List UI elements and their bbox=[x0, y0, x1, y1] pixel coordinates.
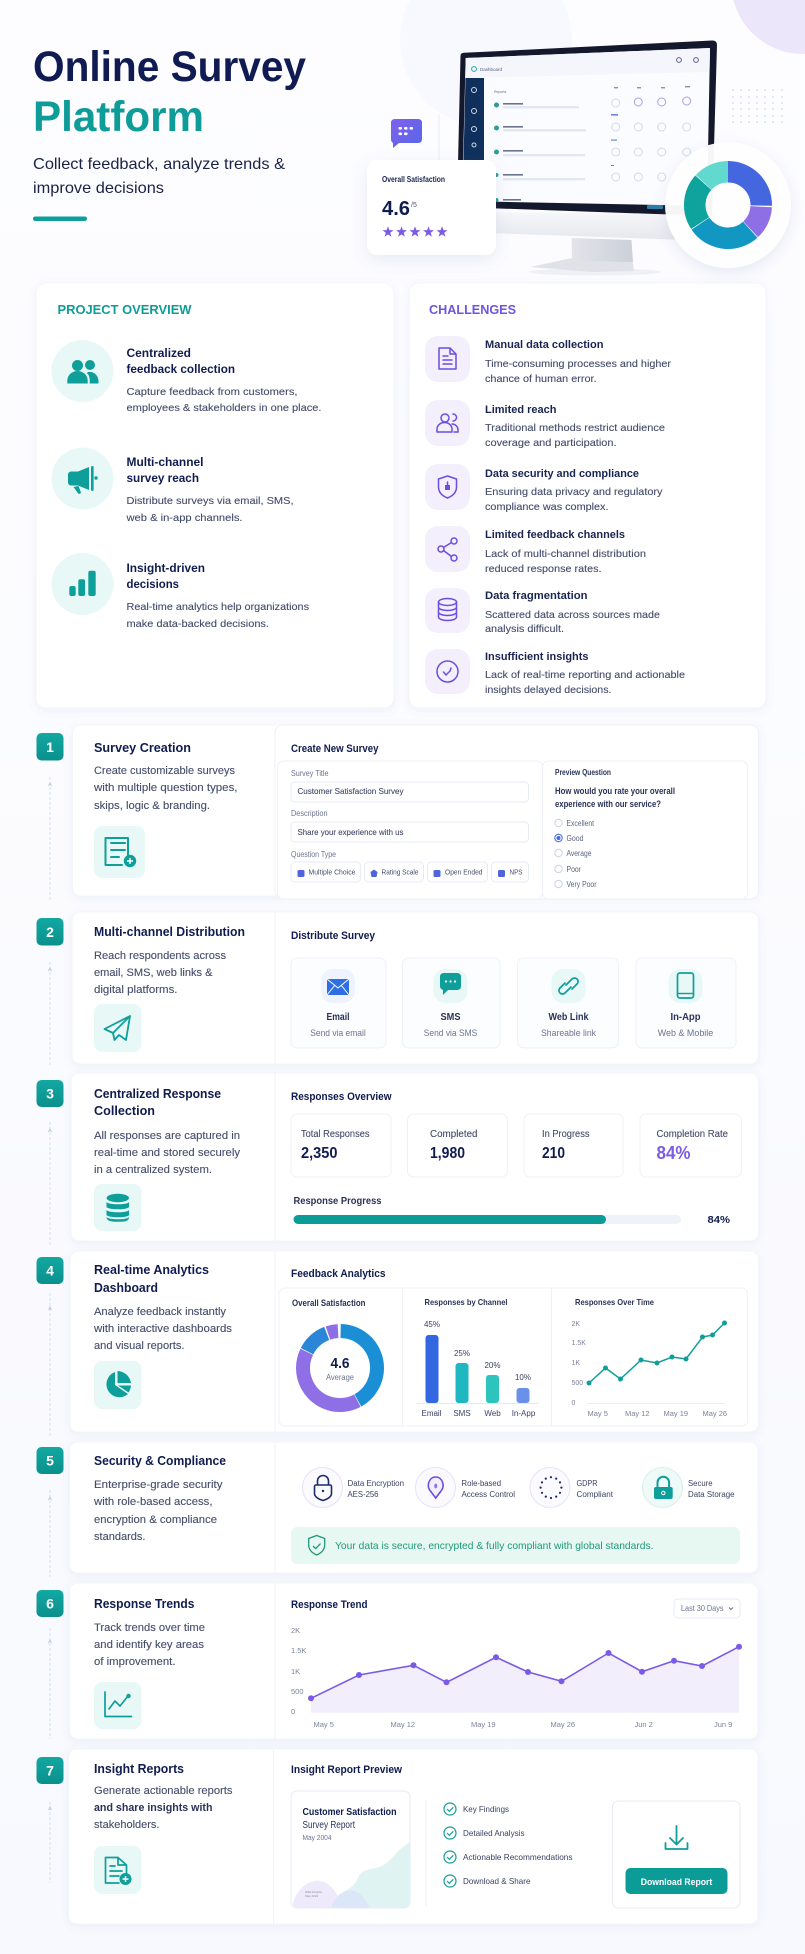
survey form: Multiple Choice bbox=[308, 868, 356, 876]
step title and description: Response Trends bbox=[94, 1596, 194, 1611]
report cover preview: Survey Report bbox=[302, 1820, 355, 1831]
checklist bbox=[444, 1803, 572, 1887]
item: multi-channel survey reach: Multi-channel bbox=[126, 455, 204, 469]
item: centralized feedback collection: employees & stakeholders in one place. bbox=[126, 402, 322, 414]
challenge: insufficient insights bbox=[425, 649, 685, 696]
badge 2: 2 bbox=[46, 924, 54, 940]
item: multi-channel survey reach: web & in-app channels. bbox=[125, 512, 242, 524]
survey form: Question Type bbox=[291, 850, 336, 859]
chart: response trend line: May 12 bbox=[390, 1720, 415, 1729]
chart: responses by channel: SMS bbox=[453, 1409, 471, 1418]
preview question: How would you rate your overall bbox=[555, 786, 675, 796]
survey form: Rating Scale bbox=[382, 868, 418, 876]
channel: email: Send via email bbox=[310, 1028, 366, 1038]
step title and description: Multi-channel Distribution bbox=[94, 924, 245, 939]
badge 3 bbox=[36, 1080, 64, 1107]
donut chart: header bbox=[665, 142, 791, 268]
chart: responses over time: May 26 bbox=[702, 1409, 727, 1418]
chart: responses by channel: 25% bbox=[454, 1349, 470, 1358]
challenge: limited reach: Traditional methods restrict audience bbox=[485, 422, 665, 434]
chart: responses over time: 1K bbox=[572, 1360, 580, 1367]
subtitle bbox=[33, 156, 285, 197]
report cover preview: May 2024 bbox=[305, 1894, 319, 1898]
badge 2 bbox=[36, 918, 64, 946]
feature: gdpr compliant bbox=[530, 1468, 614, 1508]
step title and description: of improvement. bbox=[94, 1656, 176, 1668]
preview question: Poor bbox=[566, 865, 581, 874]
chart: response trend line: May 5 bbox=[314, 1720, 334, 1729]
survey form: Share your experience with us bbox=[298, 827, 404, 837]
card: overall satisfaction: /5 bbox=[411, 202, 417, 209]
step title and description: Track trends over time bbox=[94, 1622, 205, 1634]
chart: responses by channel: In-App bbox=[512, 1409, 536, 1418]
step title and description: Enterprise-grade security bbox=[94, 1479, 223, 1491]
channel: sms: SMS bbox=[440, 1012, 461, 1023]
feature: gdpr compliant: Compliant bbox=[576, 1490, 614, 1499]
badge 7: 7 bbox=[46, 1762, 54, 1778]
step title and description: Collection bbox=[94, 1103, 155, 1118]
challenge: limited reach bbox=[425, 400, 665, 449]
panel: project overview bbox=[36, 283, 394, 708]
chart: responses over time: May 19 bbox=[664, 1409, 688, 1418]
item: multi-channel survey reach bbox=[52, 448, 294, 524]
chart: responses over time: 1.5K bbox=[572, 1340, 586, 1347]
chart: overall satisfaction donut bbox=[290, 1298, 390, 1418]
feature: secure data storage bbox=[642, 1468, 735, 1508]
card: overall satisfaction: Overall Satisfaction bbox=[382, 174, 445, 184]
title: Platform bbox=[33, 93, 204, 141]
card: overall satisfaction bbox=[367, 160, 496, 255]
chart: responses by channel: 45% bbox=[424, 1320, 440, 1329]
subtitle: improve decisions bbox=[33, 180, 164, 197]
challenge: limited feedback channels: reduced response rates. bbox=[485, 563, 602, 575]
item: multi-channel survey reach: survey reach bbox=[126, 471, 199, 485]
step 4: real-time analytics dashboard bbox=[36, 1251, 758, 1437]
step 3: centralized response collection bbox=[36, 1073, 758, 1245]
chart: responses by channel: Email bbox=[421, 1409, 442, 1418]
accent bar bbox=[33, 216, 87, 221]
icon: report with plus bbox=[94, 1846, 142, 1894]
step title and description: skips, logic & branding. bbox=[94, 800, 210, 812]
survey form: Customer Satisfaction Survey bbox=[298, 786, 404, 796]
feature: data encryption: Data Encryption bbox=[348, 1479, 404, 1488]
step title and description: Survey Creation bbox=[94, 740, 191, 755]
badge 7 bbox=[36, 1757, 64, 1784]
chart: responses by channel bbox=[417, 1297, 538, 1418]
preview question: Good bbox=[566, 834, 584, 843]
challenge: insufficient insights: Insufficient insights bbox=[485, 651, 588, 663]
badge 3: 3 bbox=[46, 1086, 54, 1102]
item: multi-channel survey reach: Distribute surveys via email, SMS, bbox=[126, 495, 294, 507]
heading: insight report preview: Insight Report Preview bbox=[291, 1764, 402, 1776]
challenge: manual data collection: Time-consuming processes and higher bbox=[485, 358, 672, 370]
channel: web link bbox=[518, 958, 618, 1048]
step title and description: with interactive dashboards bbox=[93, 1323, 233, 1335]
step title and description: All responses are captured in bbox=[94, 1130, 240, 1142]
channel: email bbox=[291, 958, 386, 1048]
item: centralized feedback collection: Centralized bbox=[126, 346, 191, 360]
survey form: Survey Title bbox=[291, 769, 329, 778]
checklist: Actionable Recommendations bbox=[463, 1852, 572, 1862]
chart: response trend line: 1K bbox=[291, 1667, 300, 1676]
chart: responses over time: May 12 bbox=[625, 1409, 650, 1418]
step title and description bbox=[94, 1086, 241, 1176]
heading: challenges: CHALLENGES bbox=[429, 302, 516, 317]
channel: web link: Shareable link bbox=[541, 1028, 596, 1038]
checklist: Detailed Analysis bbox=[463, 1828, 524, 1838]
chart: responses by channel: Responses by Channel bbox=[424, 1297, 508, 1307]
step title and description: and share insights with bbox=[94, 1802, 213, 1814]
step title and description: in a centralized system. bbox=[94, 1164, 212, 1176]
download box bbox=[612, 1801, 740, 1908]
card: overall satisfaction: 4.6 bbox=[382, 198, 410, 220]
step title and description bbox=[94, 1761, 233, 1831]
icon: survey form with plus bbox=[94, 826, 145, 878]
step title and description: Security & Compliance bbox=[94, 1453, 226, 1468]
item: centralized feedback collection bbox=[52, 340, 322, 414]
step title and description: Dashboard bbox=[94, 1280, 158, 1295]
chart: response trend line: May 26 bbox=[550, 1720, 575, 1729]
badge 4: 4 bbox=[46, 1262, 54, 1278]
step title and description: and identify key areas bbox=[94, 1639, 205, 1651]
badge 6: 6 bbox=[46, 1596, 54, 1612]
title bbox=[33, 43, 306, 141]
badge 1: 1 bbox=[46, 739, 54, 755]
chat bubble icon bbox=[391, 119, 422, 148]
survey form bbox=[278, 761, 542, 899]
floating divider line bbox=[438, 115, 440, 161]
monitor illustration: Reports bbox=[494, 90, 507, 94]
step title and description: Real-time Analytics bbox=[94, 1262, 209, 1277]
challenge: data security and compliance bbox=[425, 464, 663, 513]
challenge: limited feedback channels bbox=[425, 526, 646, 575]
step title and description bbox=[94, 1596, 205, 1668]
step 2: multi-channel distribution bbox=[36, 912, 758, 1067]
chart: response trend line: Jun 2 bbox=[634, 1720, 653, 1729]
heading: feedback analytics: Feedback Analytics bbox=[291, 1268, 386, 1280]
feature: data encryption bbox=[302, 1468, 404, 1508]
stat: completion rate: Completion Rate bbox=[656, 1129, 728, 1140]
challenge: limited reach: Limited reach bbox=[485, 404, 557, 416]
step title and description: encryption & compliance bbox=[94, 1514, 217, 1526]
step title and description: Centralized Response bbox=[94, 1086, 221, 1101]
chart: response trend line: 0 bbox=[291, 1707, 295, 1716]
item: insight-driven decisions: make data-backed decisions. bbox=[126, 618, 269, 630]
chart: responses by channel: Web bbox=[484, 1409, 501, 1418]
dropdown: last 30 days bbox=[674, 1599, 740, 1618]
chart: response trend line: 2K bbox=[291, 1626, 300, 1635]
panel: challenges bbox=[409, 283, 766, 708]
step title and description: real-time and stored securely bbox=[94, 1147, 241, 1159]
stat: in progress bbox=[524, 1114, 623, 1177]
chart: responses over time: 500 bbox=[572, 1380, 583, 1387]
dot grid bbox=[732, 89, 783, 123]
challenge: data fragmentation: analysis difficult. bbox=[485, 623, 564, 635]
chart: responses over time: 0 bbox=[572, 1400, 576, 1407]
stat: completed: 1,980 bbox=[430, 1145, 465, 1162]
stat: completion rate: 84% bbox=[656, 1143, 690, 1163]
item: insight-driven decisions bbox=[52, 553, 309, 630]
channel: web link: Web Link bbox=[548, 1012, 589, 1023]
step title and description: Create customizable surveys bbox=[94, 765, 235, 777]
feature: role-based access control: Role-based bbox=[462, 1479, 501, 1488]
item: centralized feedback collection: Capture feedback from customers, bbox=[126, 386, 298, 398]
progress bar: Response Progress bbox=[294, 1196, 382, 1207]
heading: project overview: PROJECT OVERVIEW bbox=[58, 302, 192, 317]
channel: in-app: In-App bbox=[670, 1012, 700, 1023]
title: Online Survey bbox=[33, 43, 306, 91]
challenge: manual data collection: chance of human error. bbox=[485, 373, 596, 385]
icon: paper plane bbox=[94, 1004, 142, 1052]
report cover preview bbox=[291, 1791, 410, 1908]
stat: total responses: 2,350 bbox=[301, 1145, 338, 1162]
channel: sms bbox=[402, 958, 500, 1048]
preview question: Preview Question bbox=[555, 768, 611, 777]
step 5: security and compliance bbox=[36, 1442, 758, 1577]
feature: role-based access control bbox=[416, 1468, 515, 1508]
channel: email: Email bbox=[326, 1012, 350, 1023]
button: download report: Download Report bbox=[641, 1877, 713, 1888]
step title and description bbox=[93, 1453, 226, 1543]
progress bar: 84% bbox=[708, 1214, 731, 1226]
step title and description bbox=[93, 740, 238, 812]
feature: data encryption: AES-256 bbox=[348, 1490, 379, 1499]
feature: role-based access control: Access Control bbox=[462, 1490, 515, 1499]
channel: in-app bbox=[636, 958, 736, 1048]
step title and description bbox=[94, 924, 245, 996]
challenge: limited feedback channels: Lack of multi-channel distribution bbox=[485, 548, 646, 560]
subtitle: Collect feedback, analyze trends & bbox=[33, 156, 285, 173]
icon: trend chart bbox=[94, 1682, 142, 1729]
challenge: data security and compliance: Ensuring data privacy and regulatory bbox=[485, 486, 663, 498]
stat: completed bbox=[408, 1114, 508, 1177]
challenge: insufficient insights: insights delayed decisions. bbox=[485, 684, 612, 696]
chart: response trend line: 500 bbox=[291, 1687, 304, 1696]
step title and description: standards. bbox=[94, 1531, 146, 1543]
step title and description: with role-based access, bbox=[93, 1496, 212, 1508]
step title and description: Analyze feedback instantly bbox=[94, 1306, 227, 1318]
chart: overall satisfaction donut: Overall Satisfaction bbox=[292, 1298, 366, 1308]
step title and description bbox=[93, 1262, 233, 1352]
item: insight-driven decisions: Insight-driven bbox=[126, 561, 205, 575]
feature: secure data storage: Data Storage bbox=[688, 1490, 735, 1499]
badge 6 bbox=[36, 1590, 64, 1617]
report cover preview: Customer Satisfaction bbox=[302, 1807, 396, 1818]
stat: completed: Completed bbox=[430, 1129, 478, 1140]
icon: pie chart bbox=[94, 1361, 142, 1409]
chart: response trend line: 1.5K bbox=[291, 1646, 306, 1655]
stat: total responses bbox=[291, 1114, 391, 1177]
survey form: Description bbox=[291, 809, 328, 818]
feature: gdpr compliant: GDPR bbox=[576, 1479, 598, 1488]
heading: distribute survey: Distribute Survey bbox=[291, 930, 376, 942]
channel: in-app: Web & Mobile bbox=[658, 1028, 713, 1038]
challenge: limited reach: coverage and participation. bbox=[485, 437, 616, 449]
report cover preview: May 2004 bbox=[302, 1833, 332, 1842]
chart: overall satisfaction donut: Average bbox=[326, 1373, 355, 1382]
channel: sms: Send via SMS bbox=[424, 1028, 477, 1038]
preview question: experience with our service? bbox=[555, 799, 661, 809]
step title and description: with multiple question types, bbox=[93, 782, 238, 794]
challenge: data fragmentation: Scattered data across sources made bbox=[485, 609, 660, 621]
step title and description: email, SMS, web links & bbox=[94, 967, 213, 979]
stat: in progress: In Progress bbox=[542, 1129, 590, 1140]
heading: response trend: Response Trend bbox=[291, 1599, 368, 1611]
checklist: Key Findings bbox=[463, 1804, 509, 1814]
chart: response trend line bbox=[291, 1626, 742, 1729]
step title and description: Generate actionable reports bbox=[94, 1785, 233, 1797]
challenge: manual data collection bbox=[425, 336, 672, 385]
step title and description: Reach respondents across bbox=[94, 950, 226, 962]
challenge: insufficient insights: Lack of real-time reporting and actionable bbox=[485, 669, 685, 681]
stat: completion rate bbox=[640, 1114, 742, 1177]
chart: responses by channel: 10% bbox=[515, 1373, 531, 1382]
feature: secure data storage: Secure bbox=[688, 1479, 713, 1488]
challenge: data security and compliance: compliance was complex. bbox=[485, 501, 608, 513]
challenge: manual data collection: Manual data collection bbox=[485, 339, 604, 351]
heading: create new survey: Create New Survey bbox=[291, 743, 379, 755]
survey form: NPS bbox=[510, 868, 522, 876]
preview question: Average bbox=[566, 849, 592, 858]
badge 1 bbox=[36, 733, 64, 760]
step 1: survey creation bbox=[36, 725, 758, 902]
challenge: data security and compliance: Data security and compliance bbox=[485, 468, 639, 480]
preview question bbox=[542, 761, 748, 899]
monitor illustration bbox=[457, 40, 717, 276]
badge 4 bbox=[36, 1257, 64, 1284]
monitor illustration: Dashboard bbox=[480, 67, 503, 72]
stat: total responses: Total Responses bbox=[301, 1129, 370, 1140]
challenge: data fragmentation bbox=[425, 588, 660, 635]
step 6: response trends bbox=[36, 1583, 758, 1739]
stat: in progress: 210 bbox=[542, 1145, 565, 1162]
item: insight-driven decisions: Real-time analytics help organizations bbox=[126, 601, 309, 613]
report cover preview: Wild Insights bbox=[305, 1890, 323, 1894]
chart: responses over time: Responses Over Time bbox=[575, 1297, 654, 1307]
chart: responses over time: 2K bbox=[572, 1321, 580, 1328]
step 7: insight reports bbox=[36, 1749, 758, 1924]
challenge: limited feedback channels: Limited feedback channels bbox=[485, 529, 625, 541]
security callout banner bbox=[291, 1527, 740, 1564]
preview question: Excellent bbox=[566, 819, 595, 828]
chart: overall satisfaction donut: 4.6 bbox=[330, 1355, 350, 1372]
progress bar bbox=[294, 1196, 731, 1226]
security callout banner: Your data is secure, encrypted & fully compliant with global standards. bbox=[335, 1540, 654, 1552]
item: centralized feedback collection: feedback collection bbox=[126, 362, 235, 376]
step title and description: digital platforms. bbox=[94, 984, 178, 996]
step title and description: Insight Reports bbox=[94, 1761, 184, 1776]
preview question: Very Poor bbox=[566, 880, 597, 889]
step title and description: stakeholders. bbox=[94, 1819, 160, 1831]
chart: response trend line: Jun 9 bbox=[714, 1720, 732, 1729]
step title and description: and visual reports. bbox=[94, 1340, 184, 1352]
heading: responses overview: Responses Overview bbox=[291, 1091, 392, 1103]
dropdown: last 30 days: Last 30 Days bbox=[681, 1604, 724, 1613]
item: insight-driven decisions: decisions bbox=[126, 577, 179, 591]
challenge: data fragmentation: Data fragmentation bbox=[485, 590, 588, 602]
chart: responses by channel: 20% bbox=[484, 1361, 501, 1370]
badge 5: 5 bbox=[46, 1452, 54, 1468]
chart: response trend line: May 19 bbox=[471, 1720, 496, 1729]
badge 5 bbox=[36, 1447, 64, 1474]
survey form: Open Ended bbox=[445, 868, 482, 876]
chart: responses over time: May 5 bbox=[588, 1409, 608, 1418]
checklist: Download & Share bbox=[463, 1876, 531, 1886]
chart: responses over time bbox=[572, 1297, 727, 1418]
icon: database bbox=[94, 1184, 142, 1231]
